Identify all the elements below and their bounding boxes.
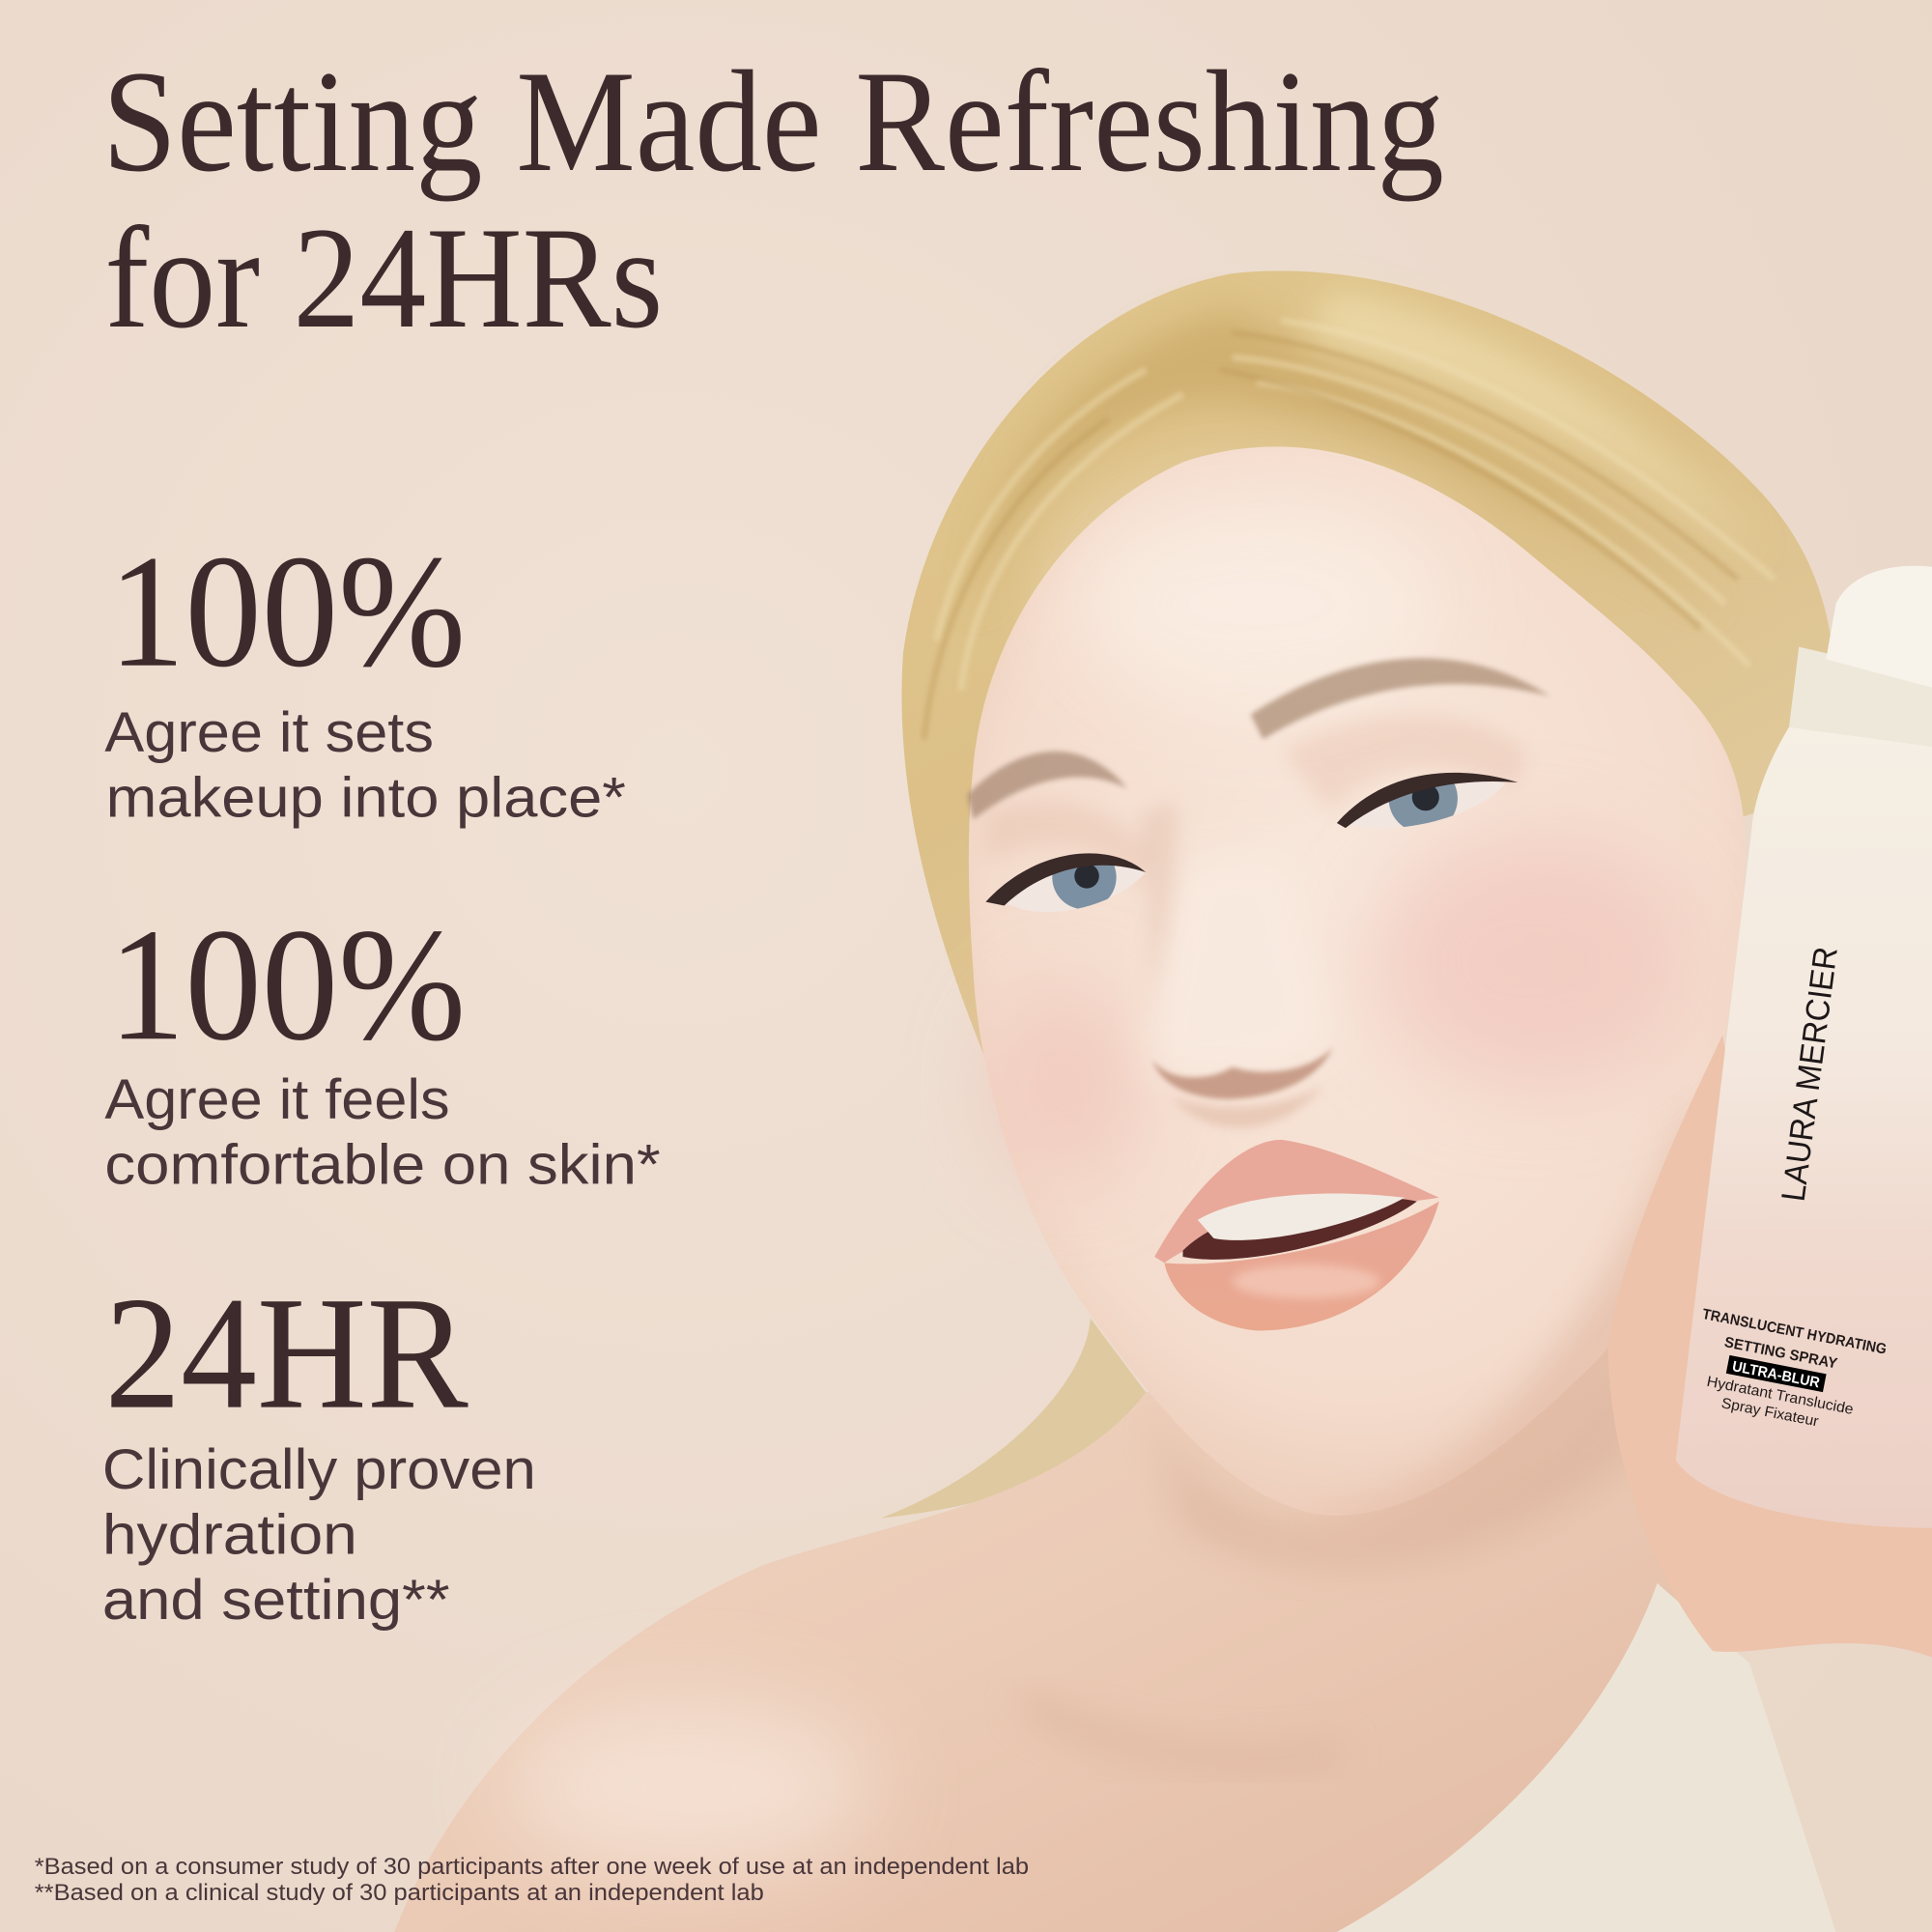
hand [1608, 1035, 1932, 1658]
stat: 100% comfortable: 100% [108, 895, 466, 1074]
left eye [967, 752, 1146, 912]
nose [1140, 801, 1333, 1127]
lips [1154, 1140, 1439, 1331]
cloth drape [1337, 1583, 1836, 1932]
bottle collar [1789, 647, 1932, 747]
product label [1685, 1306, 1888, 1440]
bottle cap [1826, 566, 1932, 688]
stat: 100% sets makeup: 100% [108, 523, 466, 701]
stat: 24HR hydration [102, 1264, 536, 1632]
product label: SETTING SPRAY [1723, 1334, 1838, 1373]
footnotes: **Based on a clinical study of 30 participants at an independent lab [35, 1880, 764, 1905]
shoulder and neck [394, 1293, 1725, 1932]
stat: 100% comfortable: comfortable on skin* [104, 1134, 661, 1197]
eye socket shading [985, 715, 1528, 887]
title: for 24HRs [104, 197, 663, 358]
product label: Hydratant Translucide [1705, 1374, 1855, 1418]
stat: 24HR hydration: and setting** [102, 1569, 450, 1632]
stat: 100% comfortable [104, 895, 661, 1197]
footnotes: *Based on a consumer study of 30 participants after one week of use at an independent lab [35, 1854, 1029, 1879]
stat: 100% sets makeup: Agree it sets [104, 701, 434, 764]
product label: TRANSLUCENT HYDRATING [1701, 1306, 1888, 1358]
stat: 100% sets makeup: makeup into place* [106, 767, 626, 830]
hair [881, 270, 1835, 1518]
face [967, 446, 1746, 1530]
stat: 100% comfortable: Agree it feels [104, 1068, 450, 1131]
title [102, 41, 1444, 358]
product bottle [1676, 566, 1932, 1528]
product label: ULTRA-BLUR [1731, 1358, 1821, 1391]
stat: 24HR hydration: 24HR [104, 1264, 469, 1443]
right eye [1251, 658, 1550, 833]
brand name: LAURA MERCIER [1776, 945, 1845, 1204]
product label: Spray Fixateur [1719, 1395, 1820, 1430]
title: Setting Made Refreshing [102, 41, 1444, 202]
illustration: woman portrait [394, 270, 1932, 1932]
stat: 100% sets makeup [104, 523, 626, 830]
stat: 24HR hydration: Clinically proven [102, 1438, 536, 1501]
footnotes [35, 1854, 1029, 1905]
bottle body [1676, 727, 1932, 1528]
stat: 24HR hydration: hydration [102, 1503, 357, 1566]
